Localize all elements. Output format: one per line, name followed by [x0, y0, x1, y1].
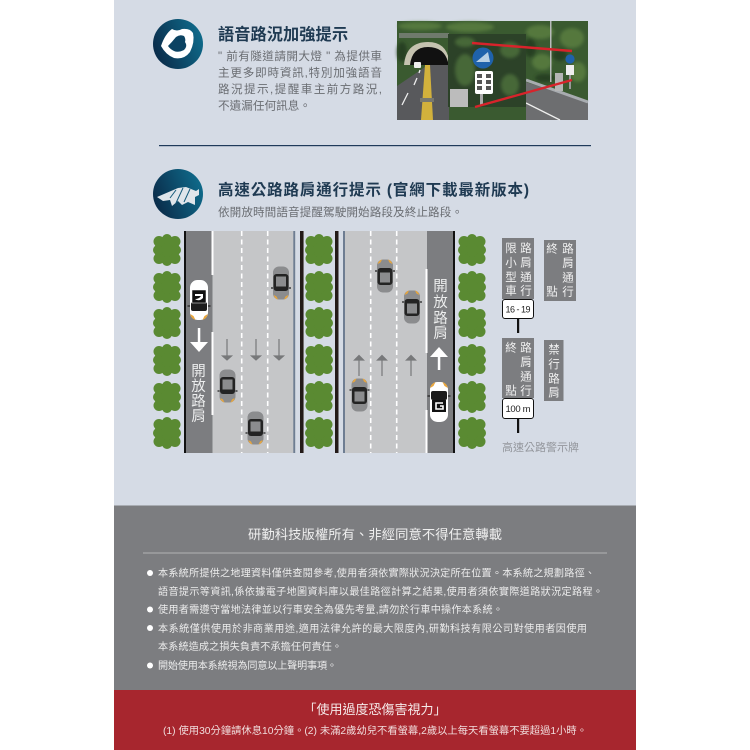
heading: copyright: 研勤科技版權所有、非經同意不得任意轉載: [248, 526, 502, 542]
text block: voice alerts description: 路況提示,提醒車主前方路況,: [218, 82, 382, 96]
sign: shoulder travel end point: 點: [546, 284, 558, 298]
sign: shoulder travel end point: [544, 240, 576, 301]
label: open shoulder: 開: [191, 364, 206, 380]
sign: shoulder travel end point: 行: [562, 286, 574, 298]
label: open shoulder right: 路: [433, 310, 448, 327]
road: northbound carriageway: [335, 231, 455, 453]
sign: no shoulder travel: 禁: [548, 344, 560, 356]
heading: voice alerts: 語音路況加強提示: [218, 25, 348, 44]
sign: small vehicle shoulder hours: 車: [505, 284, 517, 298]
sign: small vehicle shoulder hours: 型: [505, 270, 517, 284]
lane arrows: northbound: [354, 356, 416, 376]
panel: copyright and disclaimer: [114, 506, 636, 690]
sign: no shoulder travel: 路: [548, 372, 560, 386]
sign: end point 100 m: 行: [520, 384, 532, 398]
trees: centre column: [305, 234, 333, 449]
sign: small vehicle shoulder hours: 16 - 19: [506, 304, 530, 314]
car: white navigation car northbound: [428, 382, 450, 422]
label: open shoulder: 放: [191, 378, 206, 395]
icon: voice lips badge: [153, 19, 203, 69]
sign: small vehicle shoulder hours: 限: [505, 242, 517, 255]
label: open shoulder right: 開: [433, 279, 448, 295]
car: grey traffic: [218, 266, 291, 444]
arrow: white shoulder direction: [190, 328, 208, 352]
car: grey traffic northbound: [350, 260, 422, 412]
panel: eyesight warning: [114, 690, 636, 750]
text block: voice alerts description: 主更多即時資訊,特別加強語音: [218, 66, 382, 80]
sign: shoulder travel end point: 通: [562, 270, 574, 284]
car: white navigation car: [188, 280, 210, 320]
text block: eyesight guidance: (1) 使用30分鐘請休息10分鐘。(2) 未滿2歲幼兒不看螢幕,2歲以上每天看螢幕不要超過1小時。: [163, 724, 587, 737]
section: voice road alerts: [153, 19, 588, 120]
trees: left column: [153, 234, 181, 449]
sign: small vehicle shoulder hours: 路: [520, 241, 532, 255]
sign: no shoulder travel: 肩: [548, 386, 560, 400]
sign: shoulder travel end point: 肩: [562, 256, 574, 270]
sign: small vehicle shoulder hours: [502, 238, 534, 333]
photo: tunnel road with sign: [397, 21, 588, 120]
sign: no shoulder travel: 行: [548, 358, 560, 371]
sign: small vehicle shoulder hours: 通: [520, 270, 532, 284]
sign: end point 100 m: 肩: [520, 355, 532, 369]
list: disclaimer items: [147, 566, 603, 672]
arrow: white shoulder direction up: [430, 347, 448, 370]
list: disclaimer items: 本系統僅供使用於非商業用途,適用法律允許的最大限度內,研勤科技有限公司對使用者因使用: [158, 622, 587, 635]
heading: shoulder alerts: 高速公路路肩通行提示 (官網下載最新版本): [218, 180, 529, 199]
sign: end point 100 m: 點: [505, 384, 517, 398]
page background panel: [114, 0, 636, 506]
text block: voice alerts description: [218, 49, 382, 112]
label: open shoulder: 肩: [191, 408, 206, 425]
sign: small vehicle shoulder hours: 行: [520, 284, 532, 298]
road: southbound carriageway: [184, 231, 304, 453]
icon: highway shoulder badge: [153, 169, 203, 219]
sign: no shoulder travel: [544, 340, 564, 401]
text block: shoulder alerts subtitle: 依開放時間語音提醒駕駛開始路段及終止路段。: [218, 205, 463, 219]
sign: end point 100 m: 100 m: [506, 404, 531, 415]
diagram: highway with open shoulders: [153, 231, 486, 453]
sign: end point 100 m: [502, 338, 534, 433]
sign: end point 100 m: 終: [505, 340, 517, 354]
divider: [159, 145, 591, 146]
list: disclaimer items: 開始使用本系統視為同意以上聲明事項。: [158, 659, 337, 672]
sign: end point 100 m: 路: [520, 340, 532, 354]
text block: voice alerts description: " 前有隧道請開大燈 " 為提供車: [218, 49, 382, 63]
trees: right column: [458, 234, 486, 449]
sign: small vehicle shoulder hours: 小: [505, 256, 517, 270]
text block: voice alerts description: 不遺漏任何訊息。: [218, 98, 311, 112]
lane arrows: southbound: [222, 339, 284, 360]
label: open shoulder: 路: [191, 393, 206, 410]
sign: small vehicle shoulder hours: 肩: [520, 256, 532, 270]
list: disclaimer items: 本系統所提供之地理資料僅供查閱參考,使用者須依實際狀況決定所在位置。本系統之規劃路徑、: [158, 566, 595, 580]
list: disclaimer items: 本系統造成之損失負責不承擔任何責任。: [158, 640, 342, 653]
signs: highway warning signs: [502, 238, 579, 454]
list: disclaimer items: 語音提示等資訊,係依據電子地圖資料庫以最佳路徑計算之結果,使用者須依實際道路狀況定路程。: [158, 585, 603, 598]
label: open shoulder right: [433, 279, 448, 342]
sign: shoulder travel end point: 終: [546, 242, 558, 256]
sign: end point 100 m: 通: [520, 370, 532, 384]
section: shoulder travel alerts: [153, 169, 529, 219]
label: open shoulder right: 肩: [433, 325, 448, 342]
heading: eyesight warning: 「使用過度恐傷害視力」: [303, 702, 447, 717]
caption: highway warning signs: 高速公路警示牌: [502, 440, 579, 454]
label: open shoulder right: 放: [433, 294, 448, 311]
list: disclaimer items: 使用者需遵守當地法律並以行車安全為優先考量,請勿於行車中操作本系統。: [158, 603, 503, 616]
sign: shoulder travel end point: 路: [562, 242, 574, 256]
label: open shoulder: [191, 364, 206, 425]
